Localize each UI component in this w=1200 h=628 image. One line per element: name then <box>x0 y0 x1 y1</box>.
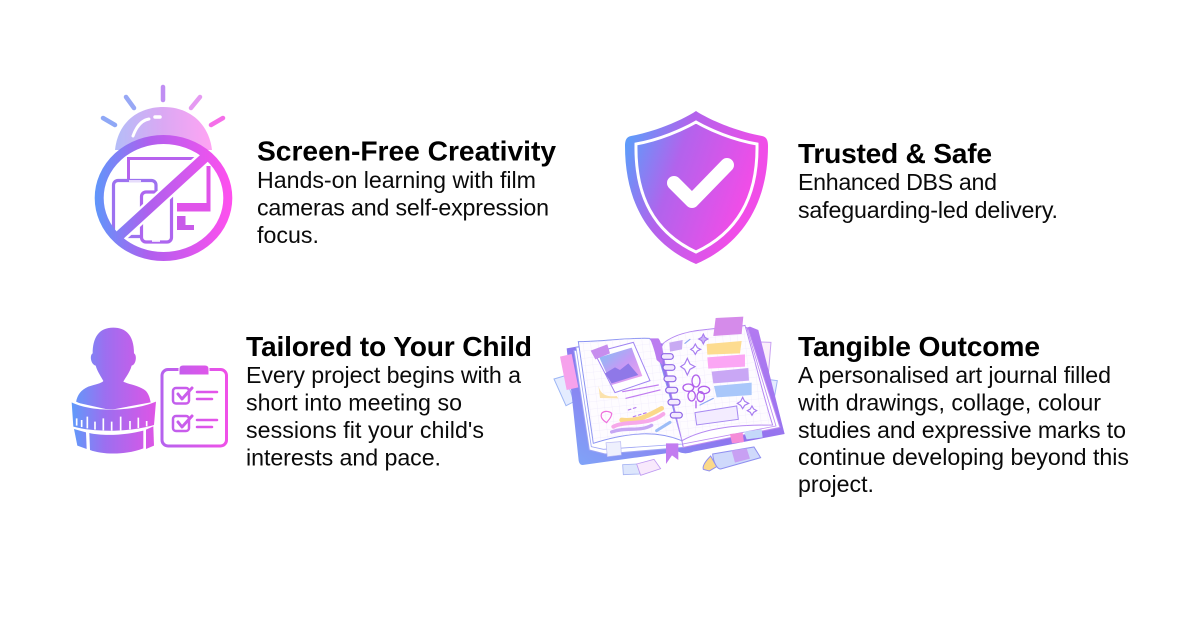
part: silhouette <box>76 328 151 410</box>
icon part: clipboard <box>162 370 226 446</box>
book part: left page <box>578 338 682 443</box>
heading: Trusted & Safe: Trusted & Safe <box>798 137 992 169</box>
book part: pink tab <box>560 354 578 390</box>
book part: torn paper and tabs behind <box>554 376 574 406</box>
text: Trusted description <box>798 169 1058 223</box>
text: Tailored description: sessions fit your child's <box>246 417 484 443</box>
icon part: screen devices <box>114 158 210 242</box>
text: Tailored description: short into meeting so <box>246 390 462 416</box>
book part: bottom tabs <box>606 442 621 457</box>
book part: spiral binding <box>661 354 682 418</box>
book part: sparkles <box>681 334 757 415</box>
icon: no screens with sun <box>96 87 231 260</box>
icon part: white halo <box>96 136 231 260</box>
book part: right page <box>662 325 773 441</box>
part: measuring tape <box>72 399 156 431</box>
book part: flower doodle <box>683 375 710 408</box>
icon part: prohibition ring <box>99 140 228 256</box>
heading: Tailored to Your Child: Tailored to Your Child <box>246 330 532 362</box>
icon part: checkmark <box>674 165 727 201</box>
text: Screen-Free description: cameras and self-expression <box>257 194 549 220</box>
device: monitor <box>128 158 200 182</box>
text: Trusted description: Enhanced DBS and <box>798 169 997 195</box>
icon part: child and tape <box>72 328 156 454</box>
text: Tangible description: with drawings, collage, colour <box>797 390 1101 416</box>
book part: polaroid photo <box>591 342 650 393</box>
book part: grid tape label <box>695 406 738 425</box>
device: phone <box>142 192 172 242</box>
book part: torn paper scraps <box>623 464 640 475</box>
text: Tailored description <box>246 362 521 470</box>
icon part: sun dome <box>115 107 212 150</box>
text: Tailored description: Every project begins with a <box>246 362 521 388</box>
text: Screen-Free description: Hands-on learning with film <box>257 167 536 193</box>
text: Trusted description: safeguarding-led delivery. <box>798 197 1058 223</box>
text: Tangible description: A personalised art journal filled <box>798 362 1111 388</box>
text: Tailored description: interests and pace. <box>246 444 441 470</box>
icon: shield with checkmark <box>625 111 768 264</box>
part: tape ticks <box>77 417 147 431</box>
text: Screen-Free description: focus. <box>257 222 319 248</box>
icon part: shield body <box>625 111 768 264</box>
device: tablet <box>114 180 156 236</box>
text: Tangible description <box>797 362 1129 497</box>
icon part: slash halo <box>118 156 207 237</box>
part: torso <box>89 431 143 454</box>
book part: page stacks <box>574 343 683 454</box>
icon part: checklist rows <box>173 388 217 431</box>
icon: child with measuring tape and checklist <box>72 328 226 454</box>
icon part: slash <box>119 156 206 236</box>
book part: ribbon bookmark <box>650 338 663 365</box>
heading: Screen-Free Creativity: Screen-Free Creativity <box>257 134 556 166</box>
icon: open art journal <box>554 317 785 475</box>
icon part: shield inner outline <box>636 122 757 252</box>
book part: paint tube <box>703 447 761 471</box>
heading: Tangible Outcome: Tangible Outcome <box>798 330 1040 362</box>
text: Tangible description: studies and expressive marks to <box>798 417 1126 443</box>
book part: paint strokes and doodles <box>598 339 713 432</box>
text: Tangible description: continue developing beyond this <box>798 444 1129 470</box>
icon part: sun rays <box>103 87 223 125</box>
book part: top tape <box>713 317 743 336</box>
book part: cover <box>567 327 785 465</box>
text: Screen-Free description <box>257 167 549 248</box>
text: Tangible description: project. <box>798 471 874 497</box>
book part: colour swatches <box>707 341 742 355</box>
